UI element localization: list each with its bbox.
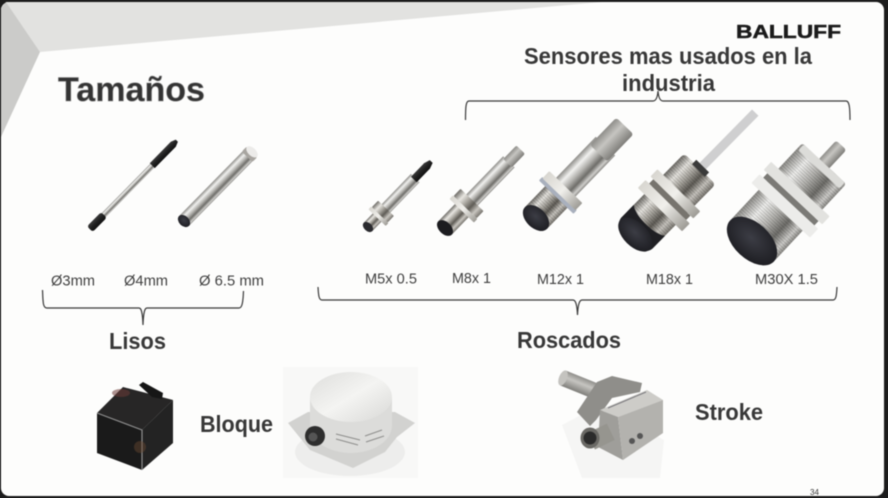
logo: Balluff: BALLUFF [736,22,841,42]
bracket: threaded sensors [318,287,837,315]
thread labels: M30X 1.5 [755,272,818,288]
page number: 34 [810,488,820,497]
heading: most used sensors: Sensores mas usados en la [524,43,812,69]
sensor: stroke [556,369,664,478]
diameter labels: Ø3mm [51,274,95,290]
label: Stroke: Stroke [695,399,763,425]
sensor: M5 [357,153,440,238]
title: Tamaños [58,71,205,109]
sensor: 6.5mm smooth [175,144,260,230]
thread labels: M18x 1 [646,272,693,288]
sensor: M18 with cable [605,91,777,265]
thread labels: M12x 1 [537,272,584,288]
label: Bloque: Bloque [200,411,273,437]
thread labels: M8x 1 [452,271,491,287]
sensor: black block [97,382,173,470]
diameter labels: Ø 6.5 mm [199,274,264,290]
heading: most used sensors: industria [622,70,715,96]
thread labels [365,271,818,288]
thread labels: M5x 0.5 [365,272,417,288]
label: Lisos: Lisos [109,328,166,354]
sensor: M12 [512,109,642,242]
sensor: M8 [429,138,533,244]
bracket: smooth sensors [42,290,244,325]
sensor: round block [283,367,418,478]
sensor: M30 [710,118,871,281]
diameter labels: Ø4mm [124,274,168,290]
bracket: most used sensors [466,91,850,120]
label: Roscados: Roscados [517,327,621,353]
heading: most used sensors [524,43,812,96]
decorative top corner band [1,2,602,137]
diameter labels [51,274,264,290]
sensor: 3mm smooth [87,138,180,232]
